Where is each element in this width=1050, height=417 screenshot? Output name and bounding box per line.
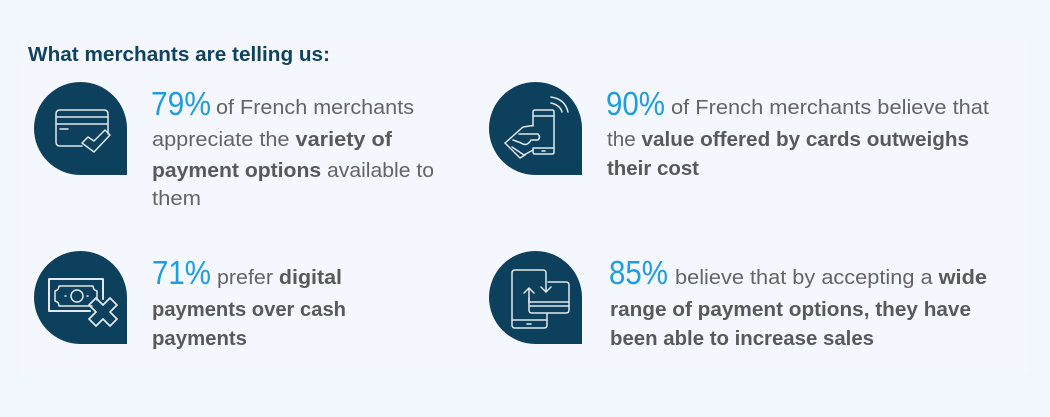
stat text: 71%: payments over cash [152,299,346,321]
stat text: 79%: them [152,188,201,210]
stat text: 85%: 85% [609,254,668,291]
stat text: 79%: 79% [151,85,211,122]
panel: 79% variety of payment options [34,82,434,210]
panel: 71% prefer digital [34,251,346,350]
stat text: 85%: believe that by accepting a wide [675,267,987,289]
stat text: 85% [609,254,987,350]
stat text: 90%: their cost [607,158,699,180]
stat text: 90%: the value offered by cards outweighs [607,129,969,151]
title: What merchants are telling us: [28,43,330,66]
icon: phone and card exchange [489,251,582,344]
stat text: 71% [152,254,346,350]
icon: banknote with cross [34,251,127,344]
stat text: 90%: of French merchants believe that [671,97,989,119]
stat text: 90% [606,85,989,180]
stat text: 85%: range of payment options, they have [610,299,971,321]
stat text: 90%: 90% [606,85,665,122]
icon: credit card with check mark [34,82,127,175]
panel: 90% value outweighs cost [489,82,989,180]
icon: hand holding phone with signal [489,82,582,175]
stat text: 79%: of French merchants [216,97,414,119]
panel: 85% wide range increases sales [489,251,987,350]
stat text: 79%: payment options available to [152,160,434,182]
stat text: 71%: payments [152,328,247,350]
stat text: 79% [151,85,434,210]
stat text: 71%: 71% [152,254,211,291]
stat text: 79%: appreciate the variety of [152,129,392,151]
stat text: 71%: prefer digital [217,267,342,289]
stat text: 85%: been able to increase sales [610,328,874,350]
